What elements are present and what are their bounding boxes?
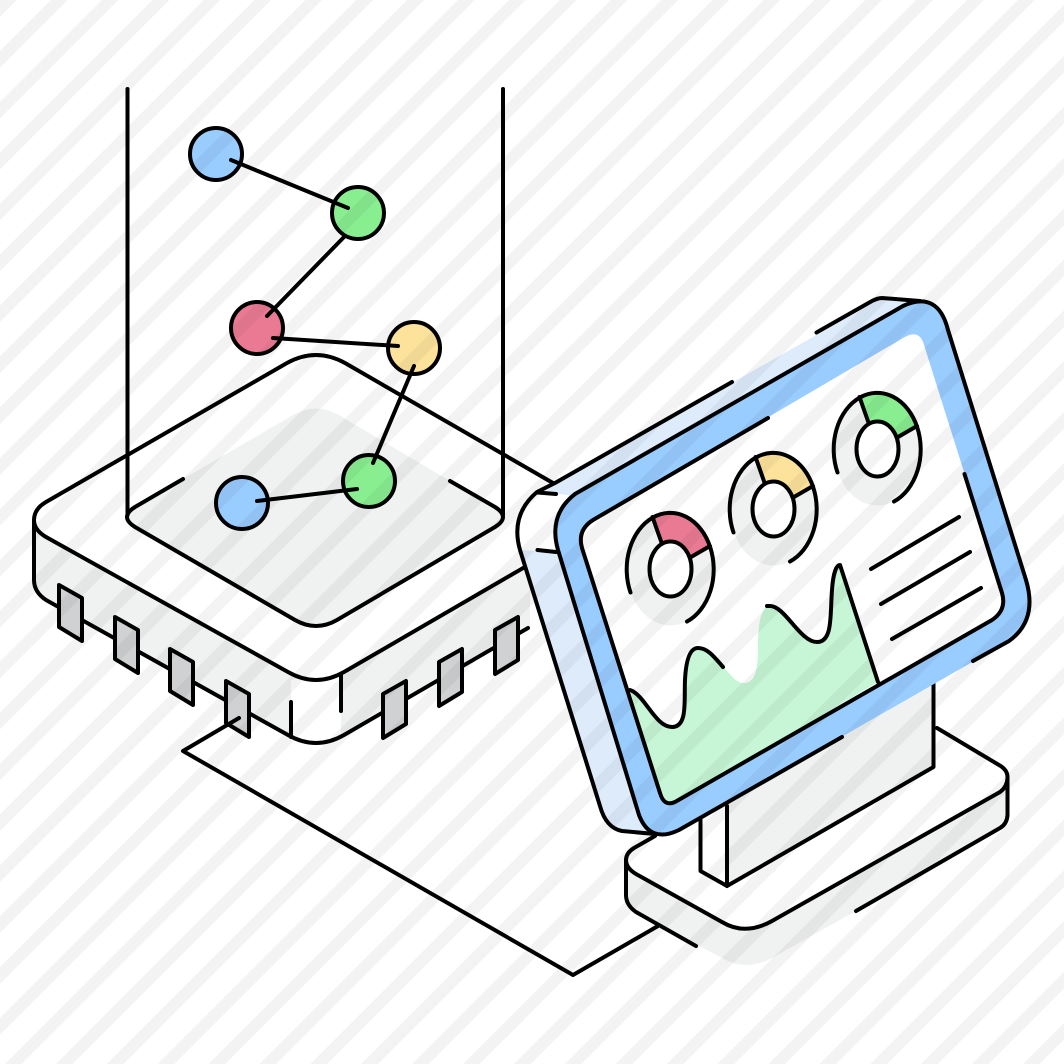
chip side walls xyxy=(34,520,530,745)
monitor back slab xyxy=(517,298,1000,834)
glass container walls xyxy=(128,89,503,515)
monitor xyxy=(517,298,1030,835)
text placeholder lines xyxy=(871,517,981,639)
gauge: green xyxy=(834,392,921,506)
molecule nodes xyxy=(190,128,440,529)
gauge: yellow xyxy=(730,452,817,566)
area chart xyxy=(630,565,878,803)
chip: isometric processor base xyxy=(34,355,553,745)
monitor stand base xyxy=(626,728,1008,965)
monitor frame outlines xyxy=(555,301,1030,835)
chip pins xyxy=(59,585,518,738)
monitor stand neck xyxy=(700,682,934,886)
chip recessed socket xyxy=(127,408,503,626)
molecule bonds xyxy=(231,160,414,501)
monitor screen xyxy=(581,334,1003,803)
monitor blue frame xyxy=(555,301,1030,835)
circuit wire connecting chip to monitor xyxy=(183,718,658,975)
gauge: red xyxy=(627,512,714,626)
chip top face xyxy=(34,355,553,680)
molecule network xyxy=(190,128,440,529)
